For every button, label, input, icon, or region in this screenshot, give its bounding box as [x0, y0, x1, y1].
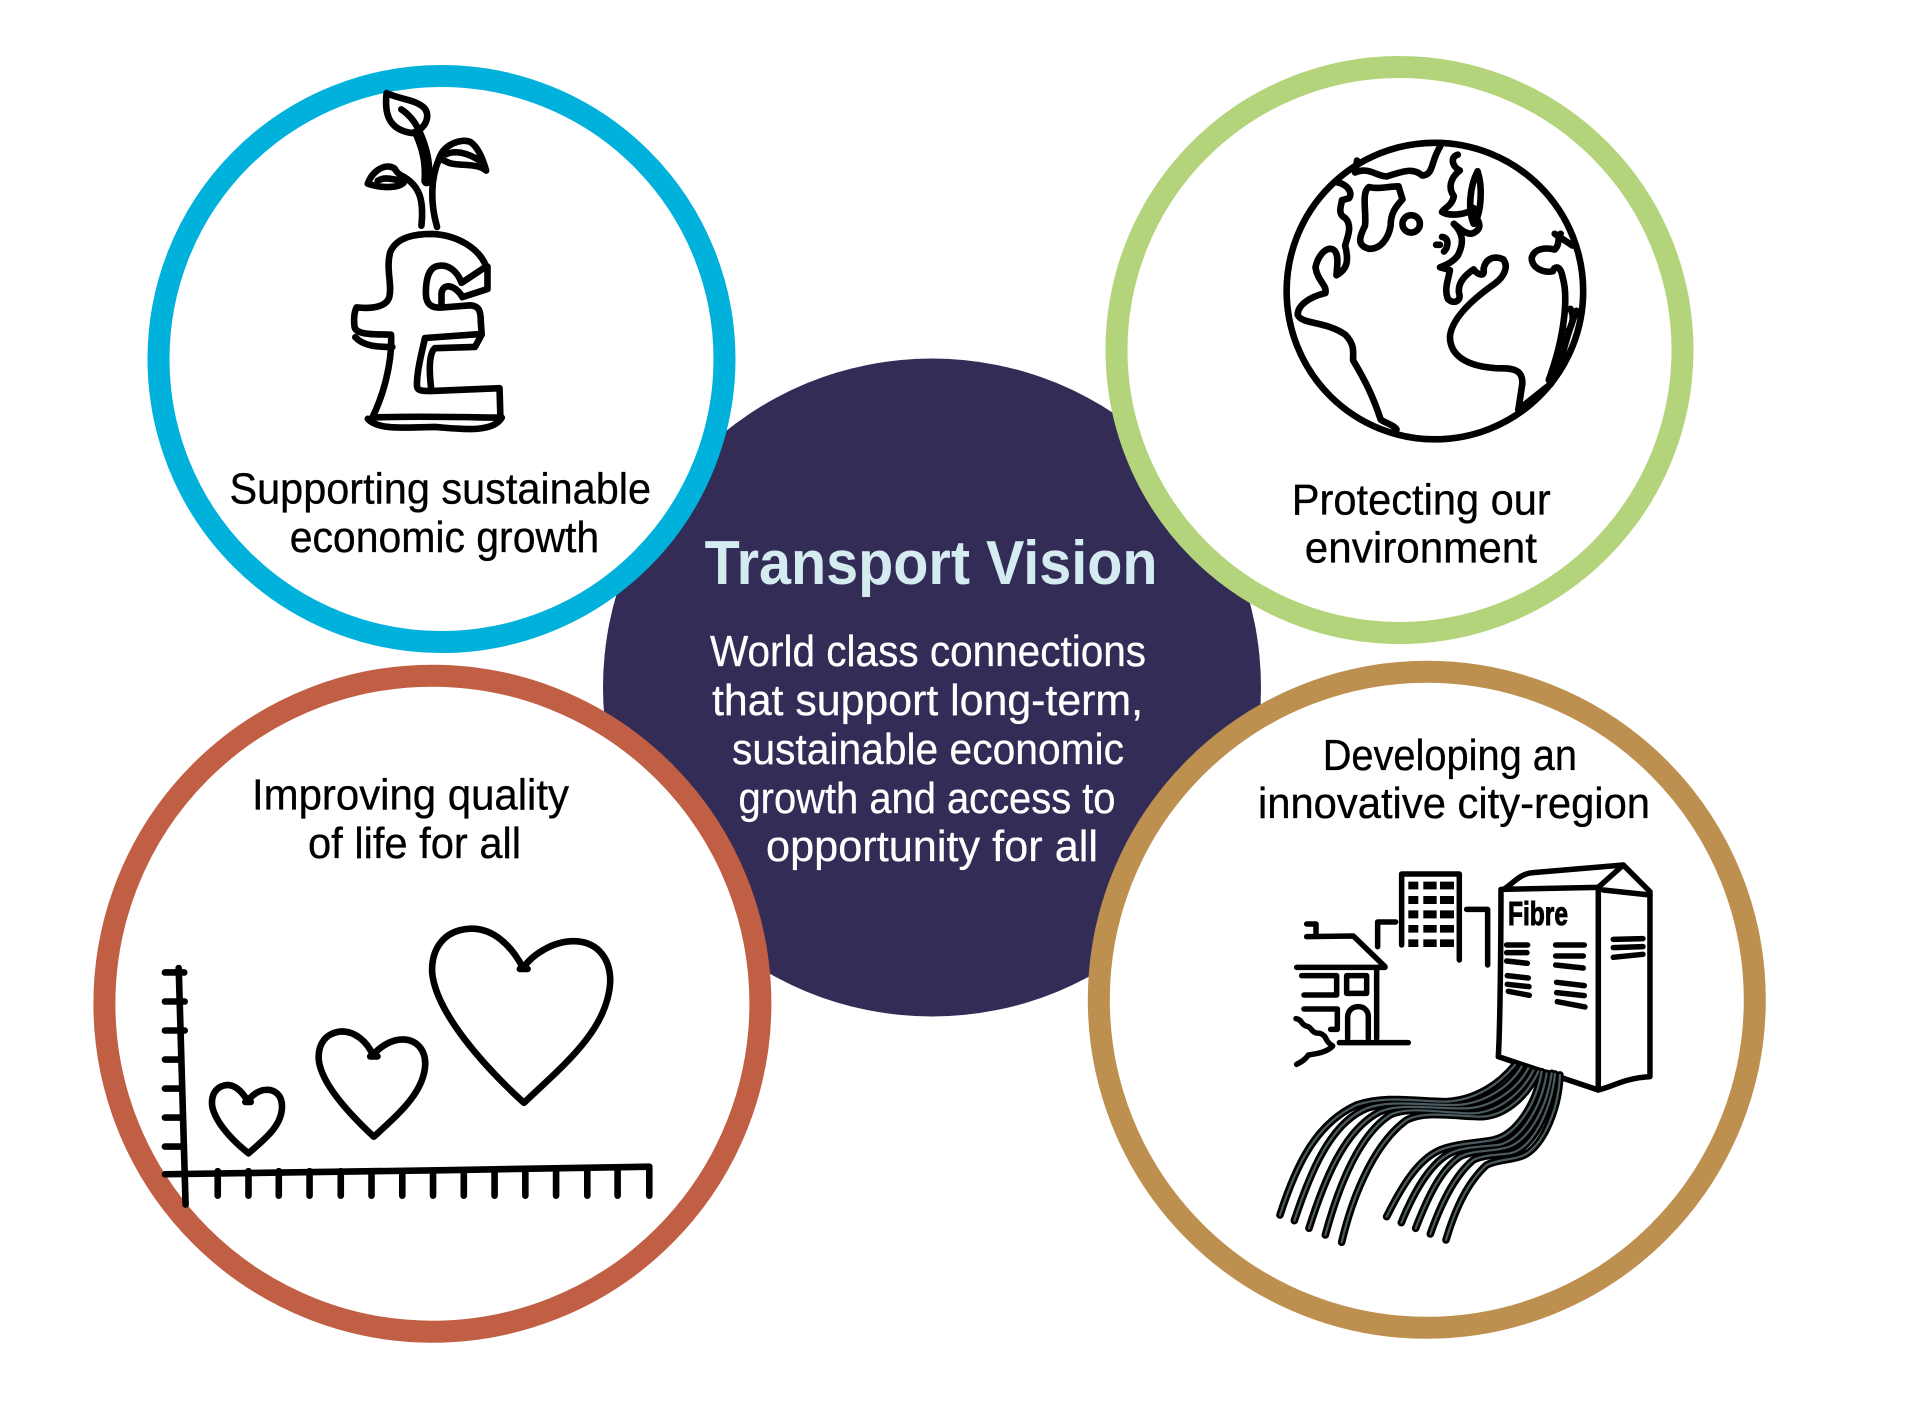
label: supporting sustainable economic growth: Supporting sustainable: [230, 464, 651, 514]
panel: improving quality of life for all: [104, 676, 760, 1332]
icon: fibre cabinet: [1498, 865, 1650, 1090]
label: developing an innovative city-region: Developing an: [1323, 731, 1577, 780]
blue ring: [158, 76, 724, 642]
label: protecting our environment: Protecting our: [1292, 476, 1551, 524]
text block: vision statement: that support long-term,: [712, 676, 1143, 725]
text block: vision statement: opportunity for all: [766, 822, 1098, 871]
brown ring: [1099, 672, 1755, 1328]
panel: supporting sustainable economic growth: [158, 76, 724, 642]
panel: protecting our environment: [1116, 67, 1682, 633]
cabinet label: Fibre: [1508, 895, 1568, 932]
heading: Transport Vision: Transport Vision: [705, 529, 1158, 598]
label: supporting sustainable economic growth: economic growth: [290, 513, 599, 562]
red ring: [104, 676, 760, 1332]
label: developing an innovative city-region: innovative city-region: [1258, 779, 1650, 828]
chart: rising hearts on axes: [165, 929, 649, 1205]
panel: developing an innovative city-region: [1099, 672, 1755, 1328]
label: improving quality of life for all: of life for all: [308, 819, 521, 868]
icon: house and tower block: [1296, 874, 1488, 1064]
icon: fibre cables: [1280, 1065, 1560, 1242]
label: protecting our environment: environment: [1305, 524, 1537, 573]
cabinet outline: [1498, 865, 1650, 1090]
icon: pound sign with seedling: [354, 93, 502, 429]
text block: vision statement: sustainable economic: [732, 725, 1124, 774]
panel: central Transport Vision circle: [603, 358, 1261, 1016]
label: improving quality of life for all: Improving quality: [252, 771, 569, 820]
green ring: [1116, 67, 1682, 633]
text block: vision statement: growth and access to: [738, 774, 1116, 823]
icon: globe: [1287, 143, 1583, 439]
house and tower outlines: [1296, 874, 1488, 1064]
text block: vision statement: World class connections: [710, 627, 1146, 676]
tower windows: [1408, 882, 1454, 947]
